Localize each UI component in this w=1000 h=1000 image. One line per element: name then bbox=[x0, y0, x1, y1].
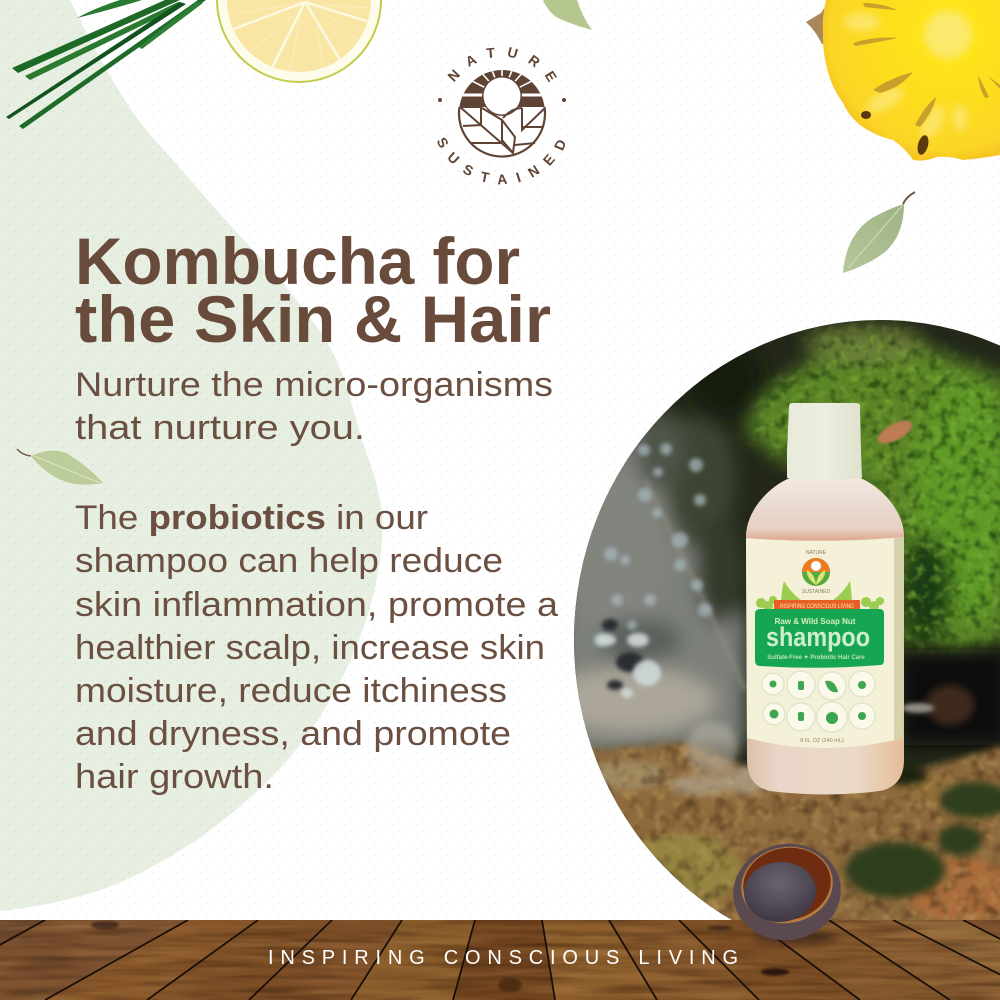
white water right bbox=[902, 703, 934, 713]
photo: bottle on wet rocks bbox=[545, 310, 1000, 930]
bottle shoulder bbox=[746, 478, 904, 542]
label logo bbox=[802, 550, 831, 595]
label leaf sprigs bbox=[756, 581, 884, 611]
rock streak bbox=[645, 480, 745, 690]
lemon rind bbox=[216, 0, 382, 83]
bottle body bbox=[746, 478, 904, 794]
pineapple flesh bbox=[823, 0, 1000, 161]
pineapple pale patches bbox=[844, 11, 972, 142]
label logo: NATURE bbox=[806, 550, 827, 556]
left leaf bbox=[17, 449, 103, 485]
lemon slice bbox=[216, 0, 382, 83]
body text: hair growth. bbox=[75, 758, 274, 796]
pineapple rind edge bbox=[806, 2, 830, 45]
title: the Skin & Hair bbox=[75, 282, 551, 356]
photo backdrop bbox=[560, 310, 1000, 930]
top leaf bbox=[543, 0, 592, 30]
nut shadow bbox=[753, 931, 837, 945]
tagline: INSPIRING CONSCIOUS LIVING bbox=[268, 947, 738, 969]
moss bbox=[745, 327, 1000, 655]
bottle cap bbox=[787, 403, 862, 480]
bottle bbox=[746, 403, 904, 794]
label green panel: Raw & Wild Soap Nut bbox=[775, 617, 856, 626]
body text: moisture, reduce itchiness bbox=[75, 672, 507, 710]
subtitle bbox=[75, 366, 553, 447]
badge icons bbox=[770, 680, 866, 724]
title bbox=[75, 224, 551, 356]
subtitle: that nurture you. bbox=[75, 409, 365, 447]
dark moss on rocks bbox=[845, 765, 1000, 898]
label green panel: shampoo bbox=[766, 622, 870, 652]
logo wordmark bbox=[438, 47, 565, 184]
nut shell bbox=[725, 835, 849, 949]
logo sun band bbox=[460, 70, 544, 116]
logo: Nature Sustained bbox=[438, 47, 566, 184]
body text: shampoo can help reduce bbox=[75, 542, 503, 580]
logo ring bbox=[459, 107, 545, 157]
orange rock glimpse bbox=[926, 685, 974, 725]
label orange band: INSPIRING CONSCIOUS LIVING bbox=[780, 603, 854, 610]
spray highlights bbox=[596, 633, 661, 698]
subtitle: Nurture the micro-organisms bbox=[75, 366, 553, 404]
body text: and dryness, and promote bbox=[75, 715, 511, 753]
label green panel bbox=[755, 609, 884, 668]
nut seed bbox=[742, 859, 818, 925]
bottle label bbox=[746, 537, 904, 748]
soap nut bbox=[725, 835, 849, 949]
plank gaps bbox=[0, 920, 1000, 1000]
body text: healthier scalp, increase skin bbox=[75, 629, 545, 667]
lemon pulp streaks bbox=[235, 5, 370, 72]
lemon membranes bbox=[233, 0, 368, 68]
lemongrass blades bbox=[6, 0, 206, 129]
wood knots bbox=[91, 921, 789, 992]
dark spray gaps bbox=[602, 619, 644, 690]
wood highlights bbox=[0, 920, 1000, 1000]
lemon flesh bbox=[227, 0, 371, 72]
splash bbox=[670, 722, 769, 795]
body text: skin inflammation, promote a bbox=[75, 586, 558, 624]
label badges bbox=[762, 671, 875, 732]
sun rays bbox=[472, 70, 532, 88]
waterfall bbox=[574, 406, 747, 756]
right leaf bbox=[843, 192, 915, 273]
wood grain bbox=[0, 920, 1000, 1000]
pineapple eyes bbox=[861, 111, 930, 156]
body text: The probiotics in our bbox=[75, 499, 428, 537]
dark hollow right of bottle bbox=[900, 650, 1000, 745]
wooden deck bbox=[0, 920, 1000, 1000]
body text bbox=[75, 499, 558, 796]
label orange band bbox=[774, 600, 860, 610]
logo leaves bbox=[460, 107, 545, 153]
volume text: 8 FL OZ (240 mL) bbox=[800, 738, 844, 744]
dark gap above waterfall bbox=[687, 340, 763, 420]
rocks bbox=[575, 742, 1000, 930]
logo dots bbox=[438, 98, 442, 102]
dry leaf on moss bbox=[876, 419, 914, 445]
horizon line bbox=[462, 94, 542, 96]
lemon pith bbox=[218, 0, 380, 81]
sun bbox=[482, 76, 522, 116]
deck boards bbox=[0, 920, 1000, 1000]
nut rim bbox=[735, 840, 839, 930]
label green panel: Sulfate-Free ✦ Probiotic Hair Care bbox=[767, 654, 865, 661]
nut interior bbox=[737, 841, 837, 927]
panel: green blob bbox=[0, 0, 382, 911]
label side shading bbox=[894, 537, 904, 741]
title: Kombucha for bbox=[75, 224, 520, 298]
pineapple slits bbox=[853, 3, 1000, 127]
logo wordmark: NATURE bbox=[448, 47, 557, 82]
pineapple slice bbox=[806, 0, 1000, 161]
label logo: SUSTAINED bbox=[802, 589, 831, 595]
logo wordmark: SUSTAINED bbox=[438, 138, 565, 184]
water droplets bbox=[593, 443, 712, 647]
